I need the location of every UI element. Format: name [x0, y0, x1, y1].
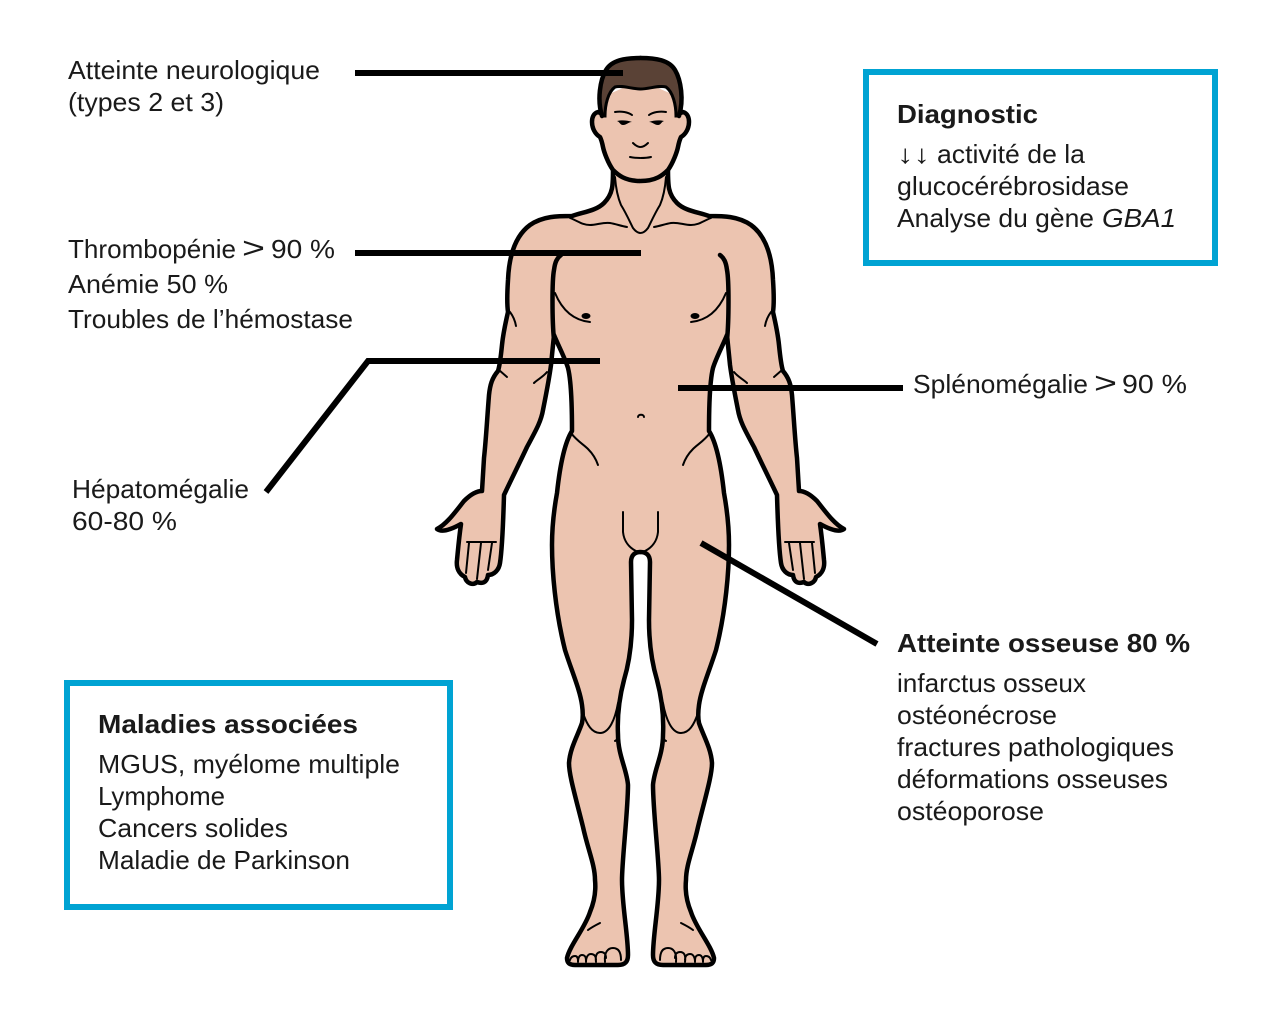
label: splenomegaly [913, 367, 1187, 400]
label: bone involvement: ostéoporose [897, 796, 1044, 826]
label: bone involvement [897, 628, 1190, 826]
label: blood disorders: > [242, 232, 265, 265]
panel: associated diseases: Maladies associées [98, 709, 358, 739]
label: blood disorders: 90 % [271, 234, 335, 264]
label: blood disorders [68, 232, 353, 334]
panel: diagnostic [866, 72, 1215, 263]
label: neurological involvement: (types 2 et 3) [68, 87, 224, 117]
panel: associated diseases: Lymphome [98, 781, 225, 811]
panel: diagnostic: activité de la [937, 139, 1086, 169]
leader line: spleen [678, 385, 903, 391]
leader line: liver [266, 361, 600, 492]
label: hepatomegaly: 60-80 % [72, 506, 177, 536]
label: bone involvement: déformations osseuses [897, 764, 1168, 794]
label: hepatomegaly [72, 474, 249, 536]
panel: diagnostic: ↓↓ [897, 139, 930, 169]
label: neurological involvement: Atteinte neurologique [68, 55, 320, 85]
panel: diagnostic: Diagnostic [897, 99, 1038, 129]
panel: diagnostic: glucocérébrosidase [897, 171, 1129, 201]
label: splenomegaly: > [1094, 367, 1117, 400]
label: splenomegaly: Splénomégalie [913, 369, 1088, 399]
label: bone involvement: ostéonécrose [897, 700, 1057, 730]
label: bone involvement: fractures pathologiques [897, 732, 1174, 762]
panel: associated diseases: Cancers solides [98, 813, 288, 843]
leader line: bone [701, 543, 877, 644]
label: bone involvement: infarctus osseux [897, 668, 1086, 698]
label: splenomegaly: 90 % [1122, 369, 1187, 399]
label: bone involvement: Atteinte osseuse 80 % [897, 628, 1190, 658]
panel: associated diseases [67, 683, 450, 907]
label: blood disorders: Anémie 50 % [68, 269, 228, 299]
leader line: blood [355, 250, 641, 256]
leader line: neurological [355, 70, 623, 76]
panel: associated diseases: MGUS, myélome multiple [98, 749, 400, 779]
human body figure [437, 58, 844, 965]
label: blood disorders: Troubles de l’hémostase [68, 304, 353, 334]
label: blood disorders: Thrombopénie [68, 234, 236, 264]
label: neurological involvement [68, 55, 320, 117]
label: hepatomegaly: Hépatomégalie [72, 474, 249, 504]
panel: associated diseases: Maladie de Parkinson [98, 845, 350, 875]
panel: diagnostic: Analyse du gène [897, 203, 1094, 233]
panel: diagnostic: GBA1 [1102, 203, 1176, 233]
